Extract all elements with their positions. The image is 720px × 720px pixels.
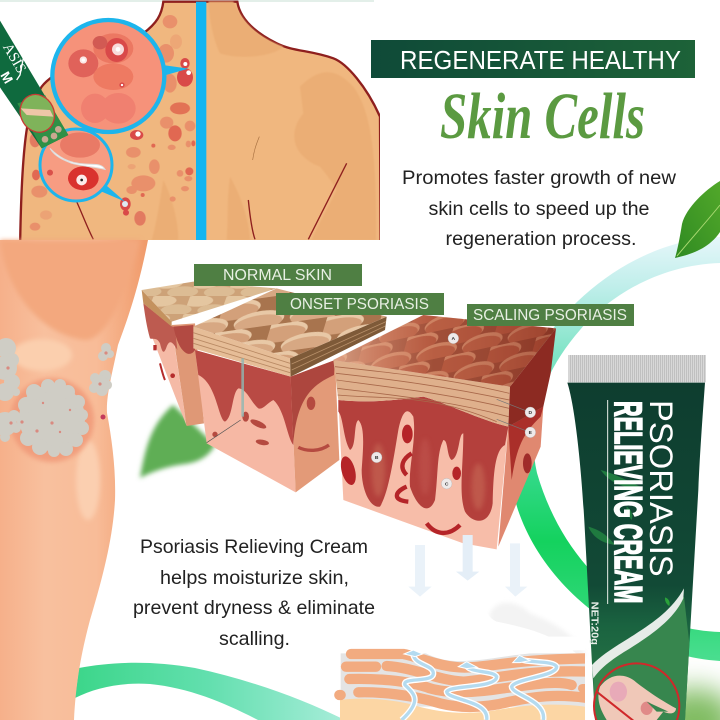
white swoosh: [592, 588, 684, 678]
label: onset psoriasis: [276, 293, 444, 315]
layer gaps: [341, 653, 585, 707]
base layer: [340, 699, 585, 720]
block: scaling psoriasis: [333, 315, 556, 549]
magnifier: small: [40, 129, 112, 201]
label: onset psoriasis: ONSET PSORIASIS: [290, 296, 429, 313]
plaque halo: [10, 378, 94, 462]
heading band: REGENERATE HEALTHY: [400, 45, 681, 75]
text block: regeneration: regeneration process.: [446, 228, 636, 250]
text block: moisturize: scalling.: [219, 628, 290, 650]
ointment squeeze: [50, 148, 105, 169]
absorption arrow heads: [404, 650, 530, 669]
small mark: [100, 414, 106, 420]
block: scaling psoriasis: A: [452, 336, 456, 342]
block: onset psoriasis: [193, 288, 387, 492]
text block: regeneration: [402, 167, 677, 250]
green ring background: [511, 237, 720, 661]
tube body: [567, 383, 705, 720]
lens pointers: [166, 65, 188, 75]
illustration: skin cross-section blocks: [142, 282, 556, 549]
text block: moisturize: prevent dryness & eliminate: [133, 597, 375, 619]
white-head lesions: [120, 58, 193, 216]
plaques: [0, 338, 114, 457]
illustration: back with psoriasis before/after: [0, 2, 381, 253]
shading patches: [152, 2, 376, 240]
divider: [606, 400, 609, 604]
magnifier: large: [52, 20, 164, 132]
illustration: leg with plaques: [0, 240, 148, 720]
bottom-left green arc: [75, 663, 345, 720]
script heading: Skin Cells: [440, 80, 645, 153]
block: scaling psoriasis: C: [445, 481, 449, 487]
text block: regeneration: skin cells to speed up the: [428, 198, 650, 220]
lesions: [30, 15, 195, 231]
thigh shade: [0, 240, 140, 340]
downward arrows: [408, 535, 527, 597]
top strip: [0, 0, 374, 2]
block: scaling psoriasis: E: [529, 430, 533, 436]
label: scaling psoriasis: SCALING PSORIASIS: [473, 307, 627, 324]
label: normal skin: [194, 264, 362, 286]
leaf accents: [588, 470, 670, 606]
illustration: skin layers with absorption arrows: [337, 637, 590, 720]
skin cell rows: [339, 654, 590, 707]
leg silhouette: [0, 240, 148, 720]
block: scaling psoriasis: B: [375, 455, 379, 461]
block: normal skin: [142, 282, 277, 426]
brand name: PSORIASIS: [643, 400, 679, 577]
blurred leaf behind skin block: [140, 405, 215, 478]
body fold lines: [77, 137, 347, 239]
text block: moisturize: helps moisturize skin,: [160, 567, 349, 589]
label: normal skin: NORMAL SKIN: [223, 267, 332, 284]
icon: leaf top right: [675, 181, 720, 258]
block: scaling psoriasis: D: [529, 410, 533, 416]
ointment tube applicator: [0, 21, 68, 148]
green blur bottom right: [653, 688, 720, 720]
knee highlight: [12, 339, 72, 371]
tube cap: [568, 355, 706, 382]
text block: regeneration: Promotes faster growth of new: [402, 167, 677, 189]
cream mound: [340, 595, 587, 660]
lower green panel: [593, 597, 689, 720]
body silhouette: [20, 2, 381, 253]
text block: moisturize: Psoriasis Relieving Cream: [140, 536, 368, 558]
centre divider: [196, 2, 206, 240]
product: cream tube: [567, 355, 706, 720]
absorption arrow shafts: [402, 655, 557, 720]
text block: moisturize: [133, 536, 375, 650]
calf highlight: [76, 440, 100, 520]
net weight: NET:20g: [589, 602, 600, 645]
ointment tube applicator: ASIS: [0, 41, 29, 76]
prohibited skin icon on tube: [594, 663, 679, 720]
